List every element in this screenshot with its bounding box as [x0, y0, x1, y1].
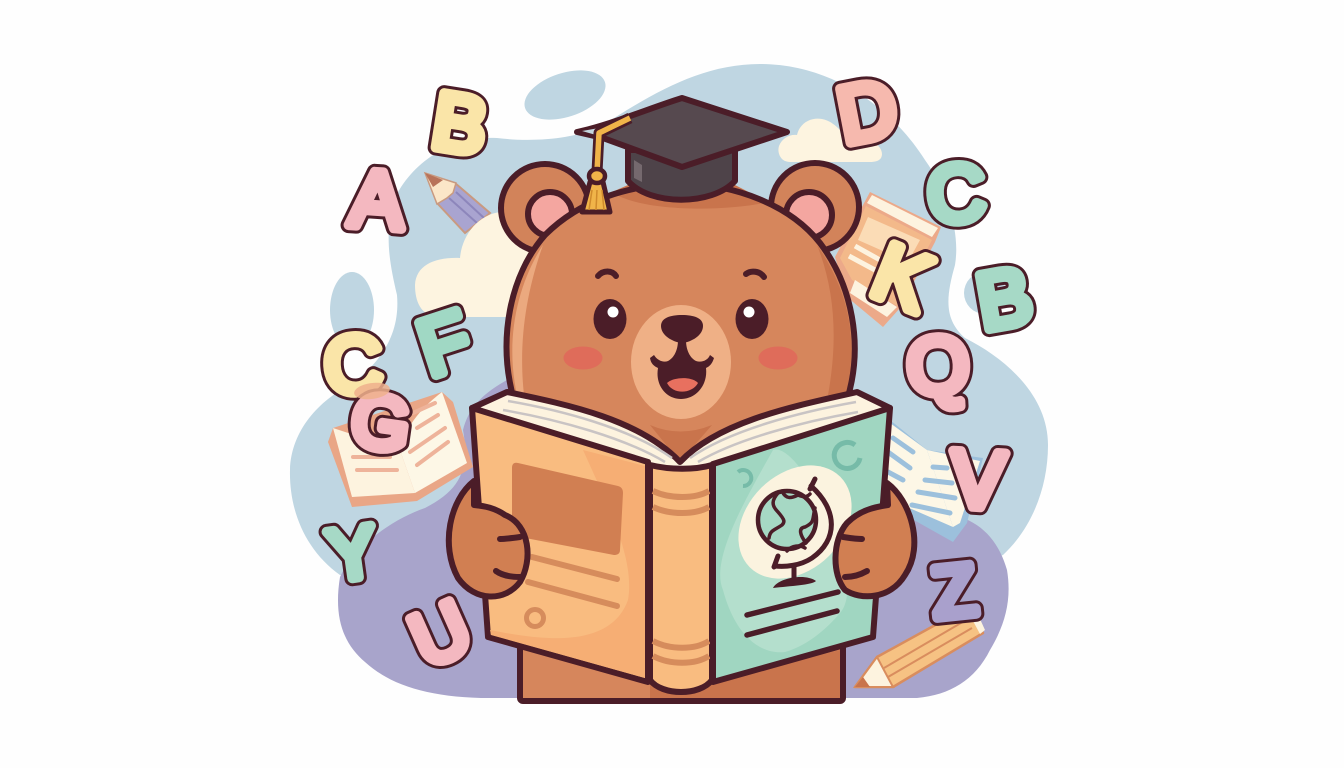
- letter C mint: C: [924, 147, 988, 240]
- letter V: V: [949, 434, 1008, 525]
- left brow: [598, 272, 616, 276]
- letter Z: Z: [928, 550, 980, 634]
- bear body: [520, 620, 843, 701]
- letter K: K: [861, 226, 944, 329]
- letter Q: Q: [905, 319, 971, 412]
- left hand: [449, 481, 528, 597]
- letter K: K: [861, 226, 944, 329]
- tassel: [582, 169, 610, 212]
- letter B right: B: [970, 250, 1038, 347]
- pages: [472, 392, 890, 470]
- letter V: V: [949, 434, 1008, 525]
- book right open: [885, 420, 983, 542]
- mouth: [650, 340, 714, 399]
- left cheek: [564, 346, 602, 370]
- muzzle: [631, 305, 731, 419]
- right cheek: [758, 346, 798, 370]
- cloud right: [778, 119, 882, 162]
- letter C yellow: C: [322, 319, 384, 410]
- small rings: [738, 442, 860, 486]
- spine: [650, 465, 712, 692]
- letter C yellow: C: [322, 319, 384, 410]
- letter D: D: [830, 62, 904, 161]
- letter D: D: [830, 62, 904, 161]
- open book: [472, 392, 890, 692]
- letter U: U: [398, 584, 483, 684]
- letter U: U: [398, 584, 483, 684]
- letter Z: Z: [928, 550, 980, 634]
- letter overlap tint: [353, 381, 391, 401]
- letter F: F: [407, 294, 481, 393]
- letter B top: B: [426, 75, 493, 172]
- nose: [661, 315, 703, 343]
- book left open: [328, 392, 473, 507]
- letter G: G: [347, 377, 415, 468]
- shadow behind pages: [650, 425, 712, 462]
- tongue: [667, 378, 698, 392]
- graduation cap: [577, 98, 787, 212]
- letter A: A: [347, 153, 407, 246]
- letter B top: B: [426, 75, 493, 172]
- bear left ear: [501, 164, 589, 252]
- letter F: F: [407, 294, 481, 393]
- letter G: G: [347, 377, 415, 468]
- letter A: A: [347, 153, 407, 246]
- pencil bottom right: [855, 606, 985, 687]
- book behind K: [835, 192, 941, 327]
- bear head: [507, 184, 855, 480]
- letter Y: Y: [323, 511, 382, 597]
- right cover: [713, 408, 890, 682]
- background blobs: [290, 61, 1048, 698]
- cloud left: [415, 212, 560, 317]
- letter Y: Y: [323, 511, 382, 597]
- right hand: [835, 483, 914, 596]
- left cover: [472, 408, 648, 682]
- right brow: [746, 272, 764, 277]
- letter Q: Q: [905, 319, 971, 412]
- letter B right: B: [970, 250, 1038, 347]
- globe icon: [758, 479, 831, 588]
- left eye: [594, 299, 626, 339]
- right eye: [736, 299, 768, 339]
- bear face: [564, 272, 798, 419]
- bear right ear: [771, 163, 859, 251]
- letter C mint: C: [924, 147, 988, 240]
- pencil top left: [425, 173, 490, 233]
